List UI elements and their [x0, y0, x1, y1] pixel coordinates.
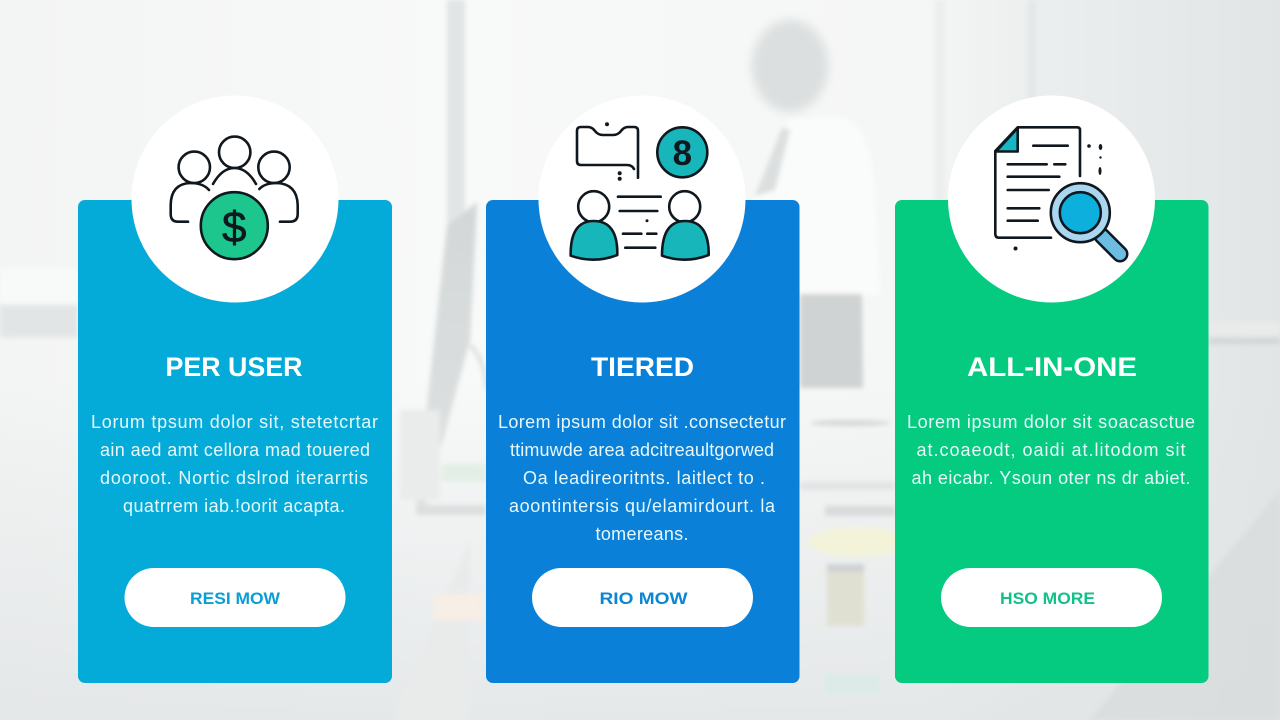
body text: per user: ain aed amt cellora mad touered: [100, 440, 370, 460]
button: per user: RESI MOW: [190, 589, 281, 608]
body text: tiered: ttimuwde area adcitreaultgorwed: [510, 440, 774, 460]
panel: all-in-one: [895, 96, 1208, 683]
button: per user: [124, 568, 346, 627]
body text: all-in-one: at.coaeodt, oaidi at.litodom sit: [916, 440, 1186, 460]
icon circle: tiered: 8: [673, 134, 692, 173]
body text: tiered: tomereans.: [596, 524, 688, 544]
body text: tiered: Oa leadireoritnts. laitlect to .: [523, 468, 765, 488]
body text: per user: dooroot. Nortic dslrod iterarrtis: [100, 468, 368, 488]
body text: all-in-one: Lorem ipsum dolor sit soacasctue: [907, 412, 1195, 432]
heading: per user: PER USER: [166, 352, 302, 382]
body text: tiered: Lorem ipsum dolor sit .consectetur: [498, 412, 786, 432]
body text: per user: Lorum tpsum dolor sit, stetetcrtar: [91, 412, 378, 432]
panel: per user: [78, 96, 392, 683]
icon circle: tiered: [538, 96, 746, 302]
button: all-in-one: [941, 568, 1162, 627]
body text: all-in-one: [907, 412, 1195, 488]
button: tiered: RIO MOW: [600, 589, 689, 608]
body text: per user: quatrrem iab.!oorit acapta.: [123, 496, 345, 516]
icon circle: per user: $: [222, 203, 247, 252]
body text: per user: [91, 412, 378, 516]
icon circle: all-in-one: [948, 96, 1155, 302]
body text: tiered: [498, 412, 786, 544]
icon circle: per user: [132, 96, 338, 302]
button: tiered: [532, 568, 753, 627]
heading: tiered: TIERED: [591, 352, 694, 382]
body text: tiered: aoontintersis qu/elamirdourt. la: [509, 496, 776, 516]
body text: all-in-one: ah eicabr. Ysoun oter ns dr abiet.: [912, 468, 1190, 488]
panel: tiered: [486, 96, 800, 683]
heading: all-in-one: ALL-IN-ONE: [967, 352, 1137, 382]
button: all-in-one: HSO MORE: [1000, 589, 1095, 608]
